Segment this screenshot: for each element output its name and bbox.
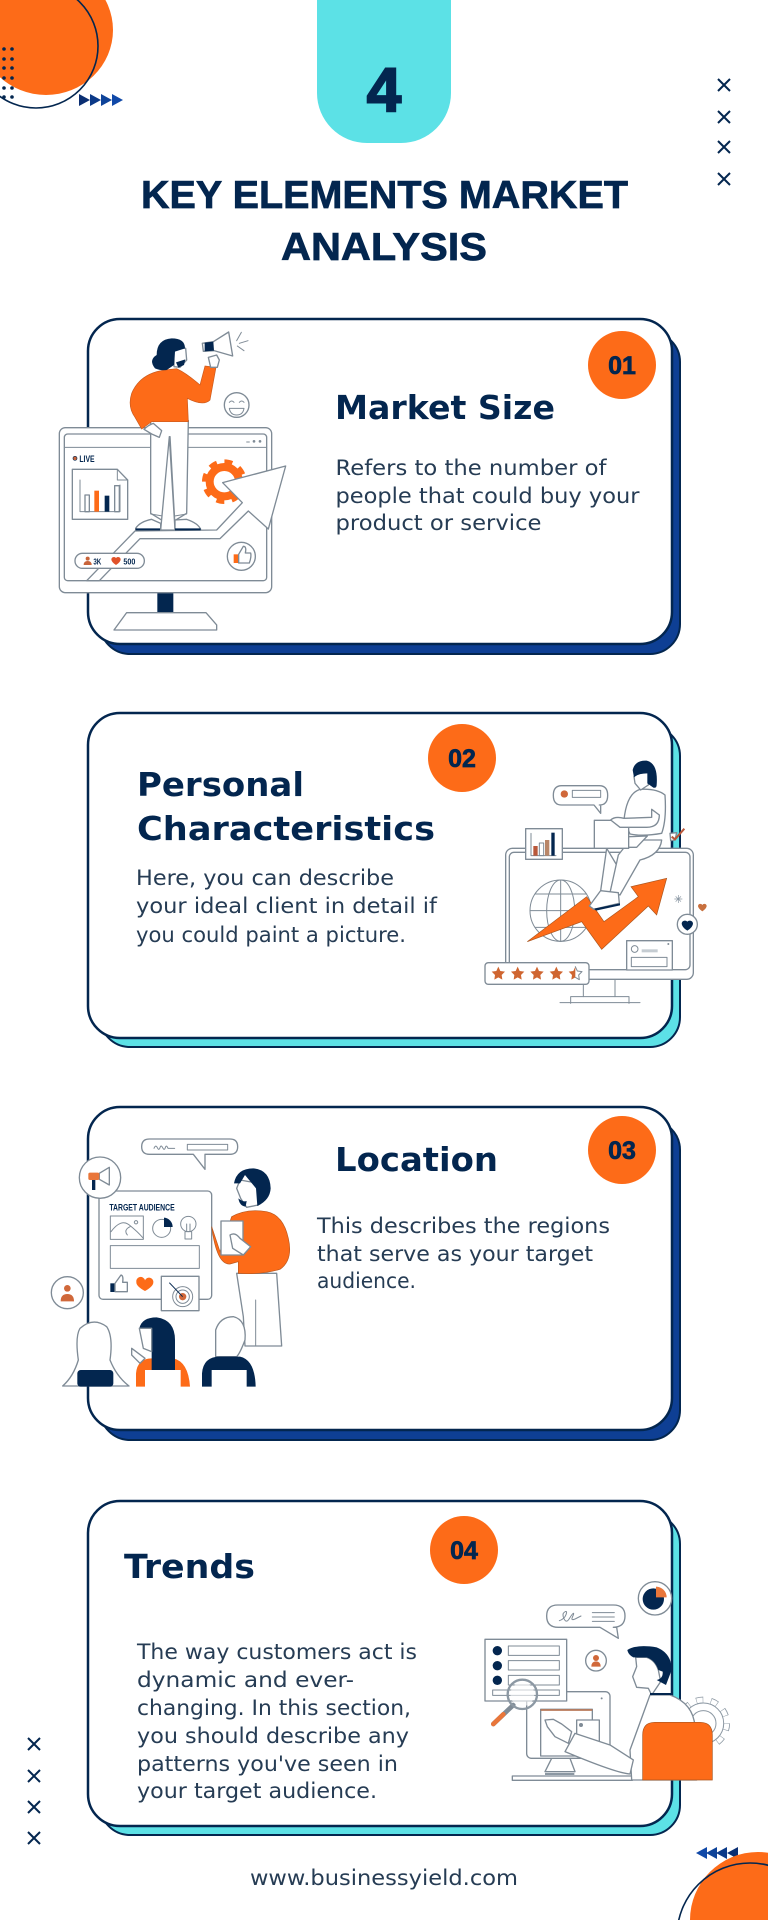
text: market size description: people that could buy your xyxy=(336,484,640,509)
chart card xyxy=(526,829,562,859)
audience xyxy=(63,1317,256,1387)
text: trends description: The way customers act is xyxy=(136,1640,417,1665)
speech bubble xyxy=(142,1139,238,1169)
text: trends description: patterns you've seen in xyxy=(137,1752,398,1777)
text: personal characteristics description: your ideal client in detail if xyxy=(136,894,437,919)
gear xyxy=(680,1700,727,1747)
monitor xyxy=(506,848,693,1003)
text: trends description: your target audience. xyxy=(137,1779,377,1804)
illustration: woman with megaphone on monitor xyxy=(59,332,286,630)
heading: personal characteristics: Characteristics xyxy=(137,809,435,848)
user badge xyxy=(586,1650,606,1671)
number badge 04: 04 xyxy=(450,1537,478,1565)
like icon xyxy=(227,542,255,570)
number badge 01: 01 xyxy=(608,352,636,380)
text: personal characteristics description: Here, you can describe xyxy=(136,866,394,891)
heading: trends: Trends xyxy=(124,1547,255,1586)
monitor xyxy=(527,1692,610,1774)
stats pill: 500 xyxy=(123,557,136,566)
text: personal characteristics description xyxy=(136,866,437,948)
text: trends description xyxy=(136,1640,417,1804)
number badge 02: 02 xyxy=(448,745,476,773)
number badge 02 xyxy=(428,724,496,792)
live label xyxy=(73,454,95,464)
text: personal characteristics description: you could paint a picture. xyxy=(136,923,406,948)
presenter xyxy=(212,1168,290,1346)
chair xyxy=(643,1722,712,1780)
text: location description: This describes the regions xyxy=(316,1214,610,1239)
monitor stand xyxy=(114,593,217,630)
desk xyxy=(512,1776,632,1780)
megaphone badge xyxy=(79,1157,121,1198)
text: trends description: changing. In this section, xyxy=(137,1696,411,1721)
number badge: 4 xyxy=(367,56,402,125)
text: location description: audience. xyxy=(317,1269,416,1294)
woman xyxy=(130,338,219,530)
title: ANALYSIS xyxy=(281,226,487,269)
star rating xyxy=(485,963,589,984)
presentation board: TARGET AUDIENCE xyxy=(109,1203,175,1213)
text: trends description: dynamic and ever- xyxy=(137,1668,354,1693)
number badge 04 xyxy=(430,1516,498,1584)
number badge xyxy=(317,0,451,143)
title xyxy=(141,174,628,269)
decoration: top-right crosses xyxy=(718,79,730,185)
title: KEY ELEMENTS MARKET xyxy=(141,174,628,217)
text: market size description xyxy=(336,456,640,536)
growth arrow xyxy=(527,878,667,949)
decoration: bottom-left crosses xyxy=(28,1738,40,1844)
heading: location: Location xyxy=(335,1140,498,1179)
decoration: bottom-right arrows xyxy=(696,1847,738,1859)
stats pill xyxy=(75,553,144,568)
decoration: top-left blob xyxy=(0,0,113,108)
panel: trends xyxy=(88,1501,727,1835)
magnifier xyxy=(493,1680,537,1724)
live label: LIVE xyxy=(79,454,95,464)
text: trends description: you should describe any xyxy=(137,1724,409,1749)
man xyxy=(545,1646,697,1780)
number badge 01 xyxy=(588,331,656,399)
speech bubble xyxy=(553,786,608,813)
number badge 03 xyxy=(588,1116,656,1184)
presentation board xyxy=(99,1191,212,1311)
panel: market size xyxy=(59,319,680,654)
monitor xyxy=(59,428,272,593)
globe xyxy=(530,880,591,941)
illustration: analyst at computer xyxy=(485,1582,727,1780)
heading: market size: Market Size xyxy=(335,388,555,427)
text: location description: that serve as your target xyxy=(317,1242,593,1267)
speech bubble xyxy=(547,1605,625,1638)
smile icon xyxy=(224,393,249,417)
text: location description xyxy=(316,1214,610,1294)
heart badge xyxy=(674,895,707,934)
illustration: presenter and audience xyxy=(51,1139,290,1387)
user badge xyxy=(51,1277,83,1309)
stats pill: 3K xyxy=(93,557,102,566)
pie badge xyxy=(638,1582,672,1615)
footer url: www.businessyield.com xyxy=(250,1866,518,1891)
woman with laptop xyxy=(589,761,684,911)
text: market size description: product or service xyxy=(336,511,542,536)
decoration: top-left arrows xyxy=(79,94,123,106)
illustration: woman on monitor with growth arrow xyxy=(485,761,707,1003)
decoration: bottom-right blob xyxy=(677,1852,768,1920)
gear xyxy=(204,462,244,502)
text: market size description: Refers to the number of xyxy=(336,456,607,481)
panel: personal characteristics xyxy=(88,713,707,1047)
number badge 03: 03 xyxy=(608,1137,636,1165)
heading: personal characteristics: Personal xyxy=(137,765,304,804)
panel: location xyxy=(51,1107,680,1440)
data card xyxy=(627,941,672,970)
data list xyxy=(485,1639,567,1701)
heading: personal characteristics xyxy=(137,765,435,848)
megaphone xyxy=(202,332,248,356)
bar chart document xyxy=(72,469,128,519)
rising arrow xyxy=(87,466,286,581)
